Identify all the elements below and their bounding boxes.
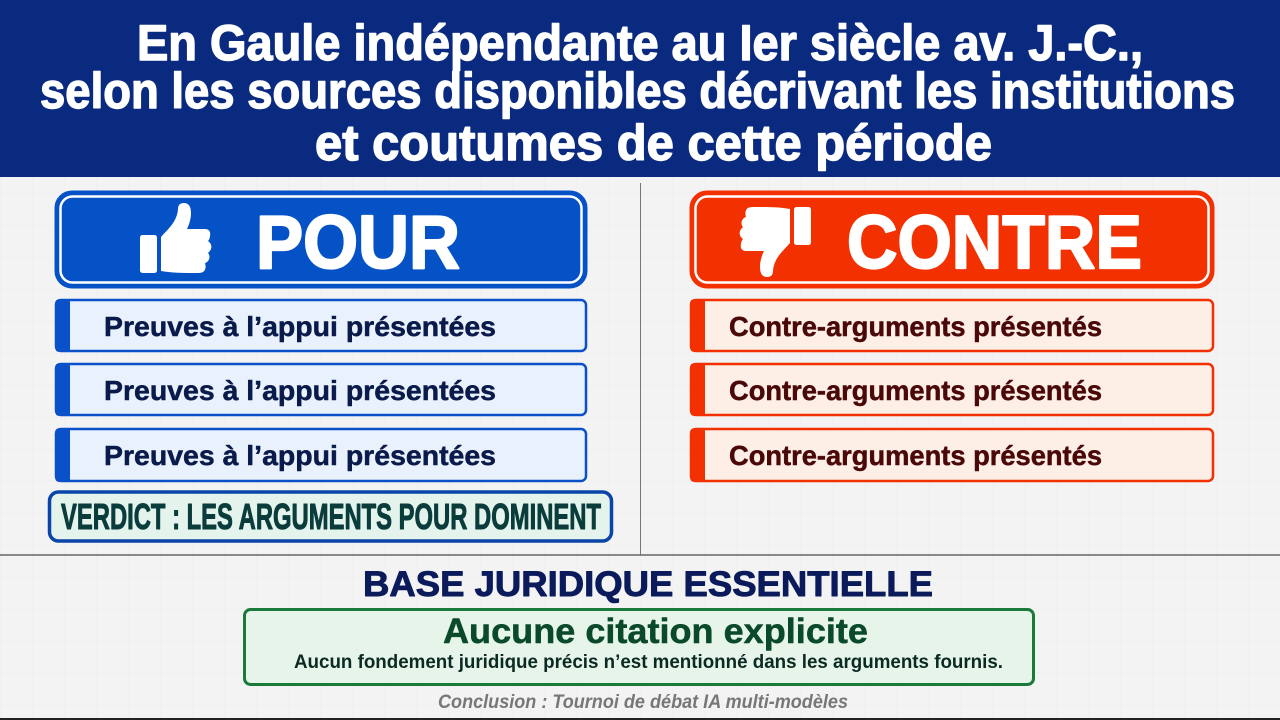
- contre header: [691, 192, 1213, 287]
- panel: legal basis: [244, 610, 1034, 684]
- pour header: [56, 192, 586, 287]
- panel: contre: [690, 192, 1213, 482]
- icon: thumbs up: [140, 203, 211, 273]
- contre item 3: Contre-arguments présentés: [729, 440, 1102, 471]
- contre item 1: Contre-arguments présentés: [729, 311, 1102, 342]
- panel: pour: [50, 192, 612, 541]
- title banner: [0, 0, 1280, 177]
- conclusion note: Conclusion : Tournoi de débat IA multi-modèles: [438, 692, 848, 713]
- panel: legal basis: Aucune citation explicite: [443, 612, 868, 651]
- pour item 2: Preuves à l’appui présentées: [104, 375, 496, 406]
- pour item 1: [55, 299, 586, 352]
- pour item 3: [55, 428, 586, 482]
- verdict: [50, 492, 612, 541]
- pour item 1: Preuves à l’appui présentées: [104, 311, 496, 342]
- contre item 2: Contre-arguments présentés: [729, 375, 1102, 406]
- verdict: VERDICT : LES ARGUMENTS POUR DOMINENT: [61, 496, 601, 537]
- heading: base juridique: BASE JURIDIQUE ESSENTIELLE: [363, 565, 933, 604]
- pour item 2: [55, 363, 586, 416]
- title banner: et coutumes de cette période: [315, 115, 992, 171]
- title banner: En Gaule indépendante au Ier siècle av. J.-C.,: [137, 15, 1143, 71]
- pour item 3: Preuves à l’appui présentées: [104, 440, 496, 471]
- panel: legal basis: Aucun fondement juridique précis n’est mentionné dans les arguments fournis.: [294, 652, 1003, 673]
- contre header: CONTRE: [847, 200, 1142, 284]
- contre item 2: [690, 363, 1213, 416]
- pour header: POUR: [256, 200, 460, 284]
- contre item 3: [690, 428, 1213, 482]
- icon: thumbs down: [740, 207, 811, 277]
- contre item 1: [690, 299, 1213, 352]
